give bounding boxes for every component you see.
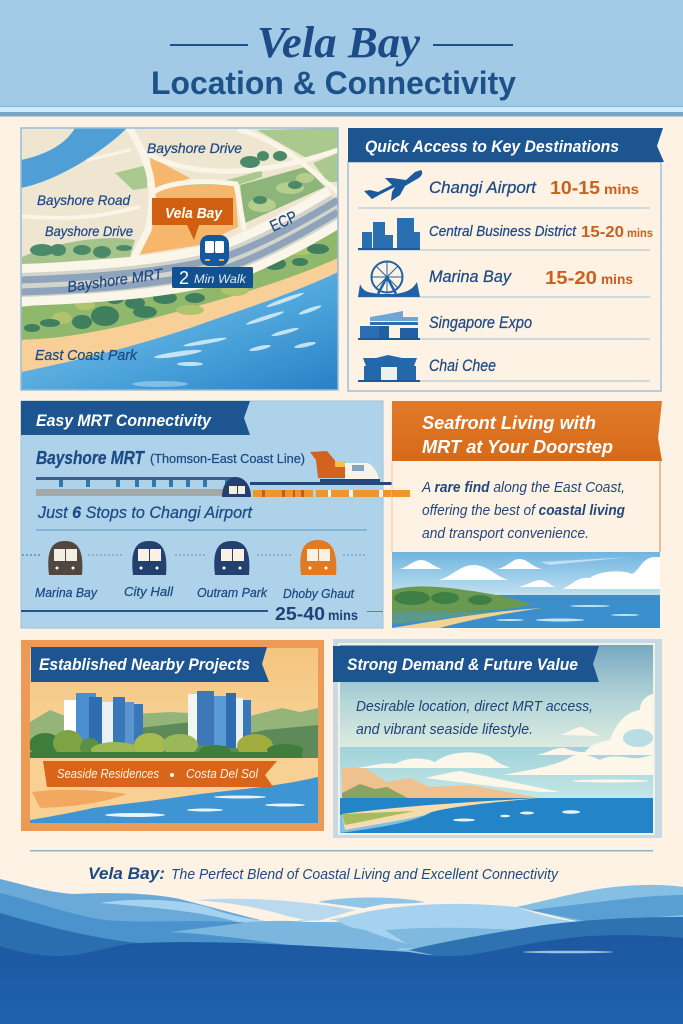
heading: quick access — [348, 128, 664, 162]
icon: track train — [222, 477, 251, 497]
row: Central Business District: 15-20 — [581, 224, 624, 241]
icon: plane tail and train — [310, 451, 380, 482]
green coastal strip — [22, 230, 338, 340]
title: Vela Bay — [257, 18, 420, 67]
badge: 2 Min Walk — [172, 267, 253, 288]
heading: established nearby projects — [31, 647, 269, 682]
station: City Hall: City Hall — [124, 584, 174, 599]
title — [151, 18, 516, 101]
orange track stub crossing into seafront panel — [392, 490, 410, 497]
map border — [21, 128, 338, 390]
heading: seafront living: MRT at Your Doorstep — [422, 437, 613, 457]
station: Marina Bay: Marina Bay — [35, 585, 98, 600]
text: just 6 stops: Just 6 Stops to Changi Airport — [37, 503, 253, 522]
text: demand description: and vibrant seaside lifestyle. — [356, 722, 533, 738]
ribbon: project names — [43, 761, 277, 787]
heading: seafront living: Seafront Living with — [422, 413, 596, 433]
row dividers — [358, 208, 650, 381]
heading: easy MRT connectivity — [21, 401, 250, 435]
illustration: seaside view — [392, 552, 660, 628]
towers: Seaside Residences — [64, 693, 143, 749]
ribbon: project names: Costa Del Sol — [186, 766, 259, 781]
heading: easy MRT connectivity: Easy MRT Connectivity — [36, 412, 212, 430]
row: Central Business District — [429, 223, 653, 241]
row: Marina Bay: Marina Bay — [429, 267, 512, 286]
map river — [21, 128, 127, 188]
text: Bayshore MRT line: Bayshore MRT — [36, 448, 146, 468]
label: Bayshore Drive left: Bayshore Drive — [45, 223, 133, 239]
panel: location map — [21, 126, 338, 390]
heading: seafront living — [392, 401, 662, 461]
station: City Hall — [124, 541, 174, 599]
row: Central Business District: Central Business District — [429, 223, 577, 240]
panel: seafront living — [392, 401, 662, 628]
sea — [340, 798, 653, 833]
heading: established nearby projects: Established Nearby Projects — [39, 656, 250, 674]
sea highlights — [132, 291, 322, 387]
station: Marina Bay — [35, 541, 98, 600]
foreground trees — [29, 730, 303, 759]
label: Bayshore Drive top: Bayshore Drive — [147, 140, 242, 156]
icon: Bayshore MRT train — [200, 235, 229, 266]
footer tagline: Vela Bay: — [88, 864, 165, 883]
panel: MRT connectivity — [21, 401, 393, 628]
heading: quick access: Quick Access to Key Destinations — [365, 138, 619, 156]
icon: airplane — [364, 170, 422, 201]
row: Changi Airport — [429, 178, 639, 198]
bottom waves — [0, 879, 683, 1024]
label: Bayshore Road: Bayshore Road — [37, 192, 131, 208]
trees — [24, 151, 329, 332]
label: ECP: ECP — [268, 208, 300, 236]
text: Bayshore MRT line — [36, 448, 305, 468]
text: seafront description: A rare find along the East Coast, — [421, 479, 625, 496]
text: seafront description: offering the best of coastal living — [422, 502, 625, 519]
connectors between stations — [22, 554, 366, 556]
station: Dhoby Ghaut — [283, 540, 355, 601]
local roads — [21, 126, 338, 256]
plot: orange site — [137, 157, 238, 255]
callout: Vela Bay: Vela Bay — [165, 205, 223, 222]
text: seafront description: and transport convenience. — [422, 525, 589, 542]
icon: expo hall — [358, 311, 420, 340]
badge: 2 Min Walk: Min Walk — [194, 272, 247, 286]
title: Location & Connectivity — [151, 65, 516, 101]
row: Marina Bay — [429, 267, 633, 288]
row: Marina Bay: mins — [601, 271, 633, 287]
beach — [21, 258, 338, 372]
hills — [342, 768, 540, 798]
heading: strong demand — [333, 646, 599, 682]
row: Singapore Expo: Singapore Expo — [429, 313, 532, 332]
panel: quick access — [348, 128, 664, 391]
map green areas — [22, 128, 338, 265]
icon: city skyline — [358, 218, 420, 250]
row: Chai Chee: Chai Chee — [429, 356, 496, 375]
text: demand description — [356, 699, 593, 738]
duration: 25-40 mins — [21, 604, 383, 624]
row: Central Business District: mins — [627, 226, 653, 240]
text: demand description: Desirable location, direct MRT access, — [356, 699, 593, 715]
label: East Coast Park: East Coast Park — [35, 347, 138, 364]
row: Changi Airport: 10-15 — [550, 178, 600, 198]
sea — [21, 272, 338, 390]
towers: Costa Del Sol — [188, 691, 251, 748]
expressway — [21, 200, 338, 292]
text: Bayshore MRT line: (Thomson-East Coast Line) — [150, 451, 305, 466]
callout: Vela Bay — [152, 198, 233, 240]
station: Outram Park — [197, 541, 268, 600]
heading: strong demand: Strong Demand & Future Value — [347, 656, 578, 674]
header band — [0, 0, 683, 116]
panel: established nearby projects — [21, 640, 324, 831]
text: seafront description — [421, 479, 625, 542]
label: Bayshore MRT: Bayshore MRT — [66, 266, 165, 296]
row: Changi Airport: Changi Airport — [429, 178, 537, 197]
hills — [30, 708, 318, 752]
row: Marina Bay: 15-20 — [545, 268, 597, 288]
icon: Chai Chee building — [358, 355, 420, 382]
row: Changi Airport: mins — [604, 181, 639, 197]
station: Dhoby Ghaut: Dhoby Ghaut — [283, 586, 355, 601]
clouds — [357, 694, 653, 792]
ribbon: project names: Seaside Residences — [57, 766, 159, 781]
duration: 25-40 mins: 25-40 — [275, 604, 325, 624]
footer tagline: The Perfect Blend of Coastal Living and Excellent Connectivity — [171, 866, 559, 883]
icon: ferris wheel — [358, 262, 420, 297]
badge: 2 Min Walk: 2 — [179, 268, 189, 288]
beach and sea — [30, 758, 318, 823]
track diagram — [36, 477, 393, 497]
panel: strong demand and future value — [333, 639, 662, 838]
duration: 25-40 mins: mins — [328, 607, 358, 623]
station: Outram Park: Outram Park — [197, 585, 268, 600]
footer rule — [30, 850, 653, 852]
